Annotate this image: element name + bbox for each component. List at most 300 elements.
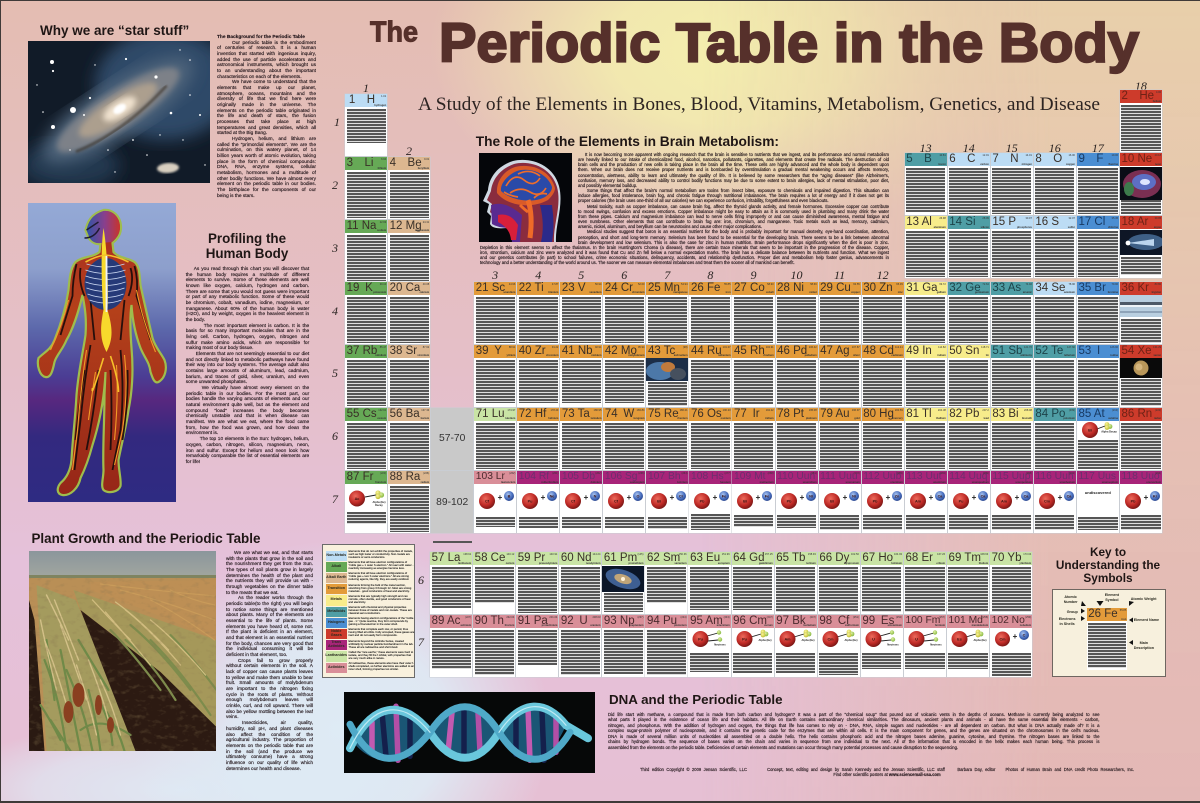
cell: 68 Er: 167.26: [937, 553, 945, 556]
cell: 81 Tl: 204.38: [938, 408, 946, 412]
cell: 26 Fe: iron: [726, 291, 731, 294]
title: The Periodic Table in the Body: The: [370, 16, 418, 48]
text: brain metabolism upper lines: brain development and low selenium. This is also the case for zinc in human nutrition. Brain performance drops significantly when the diet is poor in zinc.: [578, 240, 889, 245]
cell: 16 S: 16 S: [1035, 216, 1059, 228]
cell: 5 B: boron: [938, 163, 946, 166]
cell: 33 As: [991, 282, 1033, 344]
text: plant growth: through vegetables on the dinner table: [226, 585, 313, 590]
text: plant growth: determines our health and disease.: [226, 767, 301, 772]
cell: 91 Pa: protactinium: [542, 624, 557, 627]
key labels and arrows: Element Name: [1134, 618, 1159, 622]
cell: 99 Es: Neutrons: [887, 643, 899, 647]
cell: 96 Cm: [732, 615, 774, 677]
cell: 25 Mn: [646, 282, 689, 344]
cell: 112 Uub: Zn: [894, 494, 900, 498]
periodic table main grid: 9: [750, 268, 756, 282]
footer credits: Find other scientific posters at www.sciencemall-usa.com: [833, 772, 941, 777]
cell: 114 Uuq: ununquadium: [972, 481, 989, 484]
cell: 56 Ba: [388, 408, 430, 470]
period numbers main table: 2: [332, 178, 338, 192]
cell: 98 Cf: [818, 615, 860, 677]
cell: 112 Uub: Pb: [872, 499, 878, 503]
cell: 50 Sn: [948, 344, 990, 407]
text: plant growth: Crops fail to grow properly: [238, 659, 313, 664]
text: plant growth: periodic table(to the right) you will begin: [226, 602, 313, 607]
cell: 110 Uun: 110 Uun: [777, 471, 815, 482]
period numbers main table: 4: [332, 304, 338, 318]
cell: 58 Ce: [473, 552, 515, 614]
cell: 118 Uuo: 118 Uuo: [1121, 471, 1160, 482]
cell: 28 Ni: [776, 282, 818, 344]
cell: 12 Mg: [388, 220, 430, 282]
text: plant growth: Insecticides, air quality,: [242, 721, 313, 726]
cell: 76 Os: 190.23: [723, 408, 731, 412]
cell: 111 Uuu: Ni: [852, 494, 855, 498]
text: profiling the human body: chemically unstable and that is when disease can: [186, 414, 309, 419]
cell: 80 Hg: mercury: [893, 417, 903, 420]
cell: 78 Pt: 78 Pt: [777, 408, 804, 420]
cell: 117 Uus undiscovered: undiscovered: [1085, 490, 1111, 495]
cell: 107 Bh: +: [670, 493, 675, 502]
text: The Background for the Periodic Table: atmosphere, oceans, mountains and the: [217, 92, 316, 97]
cell: 72 Hf: [517, 408, 559, 470]
cell: 69 Tm: 168.93: [980, 553, 988, 556]
cell: 50 Sn: 118.71: [981, 346, 989, 348]
cell: 109 Mt: Fe: [765, 494, 770, 498]
text: profiling the human body: There are some that you would not guess were important: [186, 290, 309, 295]
legend: element categories: Alkali Earth: [326, 575, 346, 579]
cell: 67 Ho: 67 Ho: [862, 552, 893, 564]
cell: 52 Te: 52 Te: [1035, 344, 1063, 356]
cell: 47 Ag: 107.87: [852, 346, 860, 348]
key labels and arrows: Symbol: [1105, 598, 1119, 602]
cell: 76 Os: 76 Os: [691, 408, 722, 420]
period numbers main table: 7: [332, 492, 338, 506]
title: The Periodic Table in the Body: Periodic Table in the Body: [439, 12, 1139, 74]
cell: 56 Ba: 137.33: [421, 408, 429, 412]
cell: 110 Uun: +: [799, 493, 804, 502]
text: plant growth: are important to the nitrogen fixing: [226, 687, 313, 692]
cell: 71 Lu: 71 Lu: [476, 408, 505, 420]
cell: 17 Cl: 35.45: [1112, 217, 1118, 220]
cell: 75 Re: rhenium: [677, 417, 688, 420]
cell: 26 Fe: 26 Fe: [691, 282, 720, 294]
cell: 118 Uuo: Kr: [1153, 494, 1158, 498]
cell: 53 I: 126.90: [1110, 346, 1118, 348]
cell: 98 Cf: Alpha (He): [844, 638, 857, 642]
cell: 111 Uuu: +: [842, 493, 847, 502]
cell: 44 Ru: 44 Ru: [691, 344, 722, 356]
periodic table main grid: 13: [920, 141, 932, 155]
text: The Background for the Periodic Table: [217, 34, 316, 199]
cell: 93 Np: neptunium: [630, 624, 644, 627]
cell: 104 Rf: Pu: [528, 499, 533, 503]
cell: 80 Hg: [862, 408, 904, 470]
cell: 50 Sn: tin: [986, 354, 989, 357]
cell: 45 Rh: 45 Rh: [734, 344, 765, 356]
text: profiling the human body: iron and sulfur. Except for helium and neon look how: [186, 448, 309, 454]
legend: element categories: Elements that are typically high strength and can corrode, often ductile, and good conductors of heat and electricity.: [348, 595, 411, 604]
text: plant growth: with the plants that grow in the soil and: [226, 557, 313, 562]
text: brain metabolism upper lines: concentration, alertness, ability to learn and ultimately the quality of life. It is believed by some researchers that the "aging diseases" (like Alzheimer's,: [578, 173, 889, 178]
cell: 35 Br: [1077, 282, 1119, 344]
cell: 61 Pm: promethium: [628, 562, 644, 565]
text: brain metabolism upper lines: to mood swings, confusion and excess emotions. Copper imbalance might be easy to attain as it is commonly used in plumbing and many drink the water: [578, 209, 889, 214]
text: The Background for the Periodic Table: billion years worth of atomic evolution, taking: [217, 154, 316, 159]
cell: 99 Es: 99 Es: [862, 615, 894, 627]
cell: 87 Fr: [345, 471, 387, 533]
cell: 62 Sm: samarium: [674, 562, 687, 565]
cell: 16 S: sulfur: [1068, 226, 1075, 229]
cell: 73 Ta: 73 Ta: [562, 408, 590, 420]
text: brain metabolism upper lines: induce allergies, food intolerance, brain fog, and chronic fatigue through nutritional imbalances. The brain requires a lot of energy and if it does not get its: [578, 193, 889, 198]
key labels and arrows: Description: [1134, 646, 1154, 650]
text: plant growth: in the soil (and the produce we: [226, 750, 313, 755]
cell: 114 Uuq: [948, 471, 990, 533]
cell: 96 Cm: Alpha (He): [758, 638, 771, 642]
text: brain metabolism upper lines: arsenic, nickel, aluminum, and beryllium can be neurotoxins and cause other major complications.: [578, 224, 762, 229]
cell: 10 Ne: 10 Ne: [1121, 153, 1152, 165]
cell: 65 Tb: terbium: [806, 562, 816, 565]
cell: 94 Pu: [645, 615, 688, 677]
cell: 82 Pb: 207.2: [982, 408, 989, 412]
text: The Background for the Periodic Table: added the use of particle accelerators and: [217, 58, 316, 63]
cell: 83 Bi: [991, 408, 1033, 470]
legend: element categories: Elements that all have electron configurations of "noble gas + 1 outer S electron." All react with water - reactivity increasing as energies become less.: [348, 561, 413, 570]
cell: 109 Mt: 109 Mt: [734, 471, 766, 482]
legend: element categories: Metalloids: [327, 609, 345, 613]
period numbers main table: [332, 115, 340, 506]
cell: 5 B: [905, 153, 947, 215]
cell: 11 Na: 11 Na: [347, 220, 376, 232]
cell: 49 In: 114.82: [938, 346, 946, 348]
cell: 4 Be: 9.01: [424, 158, 429, 161]
cell: 106 Sg: [603, 471, 645, 533]
cell: 69 Tm: [947, 552, 989, 614]
text: profiling the human body: and not directly linked to metabolic pathways have found: [186, 358, 309, 363]
cell: 106 Sg: Cf: [614, 499, 619, 503]
cell: 104 Rf: Ne: [550, 494, 555, 498]
cell: 113 Uut: 113 Uut: [906, 471, 942, 482]
cell: 112 Uub: 112 Uub: [863, 471, 901, 482]
cell: 53 I: [1077, 344, 1119, 407]
cell: 103 Lr: B: [508, 494, 511, 498]
period numbers lower table: 7: [418, 635, 424, 649]
cell: 46 Pd: palladium: [805, 354, 817, 357]
cell: 9 F: fluorine: [1109, 163, 1118, 166]
cell: 28 Ni: 58.69: [810, 282, 817, 286]
period numbers lower table: [418, 573, 424, 649]
cell: 23 V: vanadium: [589, 291, 601, 294]
cell: 8 O: [1034, 153, 1076, 215]
cell: 102 No: Cm: [999, 638, 1006, 642]
cell: 115 Uup: ununpentium: [1016, 481, 1032, 484]
cell: 44 Ru: [689, 344, 732, 407]
cell: 93 Np: [602, 615, 644, 677]
cell: 99 Es: (252): [896, 616, 902, 619]
cell: 40 Zr: 91.22: [552, 346, 558, 348]
text: brain metabolism upper lines: and possibly elemental buildup.: [578, 183, 637, 188]
cell: 92 U: 92 U: [561, 615, 588, 627]
cell: 19 K: potassium: [373, 291, 386, 294]
cell: 90 Th: [473, 615, 515, 677]
text: profiling the human body: basis for so many important molecules that are in the: [186, 329, 309, 334]
cell: 112 Uub: [862, 471, 904, 533]
text: profiling the human body: making most of our body tissue.: [186, 346, 253, 351]
cell: 50 Sn: 50 Sn: [949, 344, 979, 356]
sample element cell: 26 Fe: 55.85: [1120, 609, 1126, 612]
cell: 112 Uub: (285): [897, 472, 903, 475]
periodic table main grid: 3: [492, 268, 498, 282]
cell: 101 Md: Alpha (He): [973, 638, 987, 642]
cell: 24 Cr: [603, 282, 645, 344]
text: profiling the human body: manifest. We are what we eat, where the food came: [186, 420, 309, 425]
cell: 14 Si: 28.09: [982, 217, 989, 220]
text: profiling the human body: elements to survive. Some of these elements are well: [186, 278, 309, 283]
cell: 31 Ga: gallium: [937, 291, 946, 294]
cell: 112 Uub: ununbium: [890, 481, 903, 484]
cell: 55 Cs: [345, 408, 387, 470]
text: The Background for the Periodic Table: Hydrogen, helium, and lithium are: [232, 137, 316, 142]
cell: 2 He: [1120, 90, 1162, 152]
cell: 23 V: 50.94: [595, 282, 601, 286]
image: human body nervous system: [28, 203, 176, 502]
cell: 48 Cd: [862, 344, 904, 407]
cell: 37 Rb: rubidium: [375, 354, 386, 357]
text: plant growth: veins.: [226, 715, 239, 720]
cell: 101 Md: mendelevium: [972, 624, 988, 627]
cell: 115 Uup: Ca: [1023, 494, 1029, 498]
cell: 21 Sc: 21 Sc: [476, 282, 505, 294]
cell: 118 Uuo: Pb: [1130, 499, 1136, 503]
cell: 81 Tl: [905, 408, 947, 470]
cell: 72 Hf: 178.49: [550, 408, 558, 412]
text: plant growth: without certain elements in the soil. A: [226, 664, 313, 669]
heading: Key to Understanding the Symbols: [1056, 544, 1160, 585]
cell: 35 Br: bromine: [1108, 291, 1118, 294]
lanthanides and actinides grid: [430, 552, 1032, 678]
cell: 21 Sc: 44.96: [509, 282, 515, 286]
cell: 116 Uuh: +: [1057, 493, 1062, 502]
cell: 10 Ne: 20.18: [1155, 154, 1161, 157]
cell: 102 No: +: [1013, 632, 1018, 641]
cell: 102 No: C: [1023, 634, 1026, 638]
cell: 108 Hs: 108 Hs: [691, 471, 724, 482]
cell: 46 Pd: 106.42: [809, 346, 817, 348]
text: profiling the human body: bodies handle the varying amounts of elements and our: [186, 397, 309, 402]
periodic table main grid: [344, 79, 1162, 543]
cell: 40 Zr: 40 Zr: [519, 344, 546, 356]
cell: 37 Rb: 37 Rb: [347, 344, 377, 356]
cell: 111 Uuu: unununium: [846, 481, 860, 484]
cell: 61 Pm: [602, 552, 644, 614]
text: profiling the human body: Elements that are not seemingly essential to our diet: [196, 352, 309, 357]
cell: 108 Hs: Pb: [700, 499, 705, 503]
cell: 104 Rf: (261): [552, 472, 558, 475]
image: DNA double helix: [344, 692, 595, 773]
text: The Background for the Periodic Table: diversity of life that we find here were: [217, 97, 316, 102]
cell: 112 Uub: +: [885, 493, 890, 502]
footer credits: Third edition Copyright © 2009 Jensan Scientific, LLC Concept, text, editing and design by Sarah Kennedy and the Jensan Scientific, LLC staff Barbara Day, editor Photos of Human Brain and DNA credit Photo Researchers, Inc.: [640, 766, 1134, 772]
cell: 91 Pa: [516, 615, 558, 677]
cell: 104 Rf: rutherfordium: [541, 481, 558, 484]
cell: 54 Xe: [1120, 344, 1162, 407]
text: DNA and the periodic table: assembled from the elements on the periodic table. Deficiencies of certain elements and mutations can occur through many potential processes and cause disruption to the sequencing.: [608, 745, 958, 750]
text: The Background for the Periodic Table: astronomical instruments, which brought us: [217, 63, 316, 68]
cell: 70 Yb: 70 Yb: [992, 552, 1021, 564]
cell: 75 Re: [646, 408, 689, 470]
cell: 66 Dy: [818, 552, 860, 614]
cell: 93 Np: 93 Np: [604, 615, 635, 627]
cell: 16 S: 32.07: [1068, 217, 1075, 220]
cell: 111 Uuu: (272): [854, 472, 860, 475]
cell: 10 Ne: neon: [1155, 163, 1161, 166]
cell: 63 Eu: 63 Eu: [690, 552, 720, 564]
key labels and arrows: Number: [1064, 600, 1078, 604]
cell: 13 Al: 13 Al: [906, 216, 932, 228]
cell: 108 Hs: Fe: [722, 494, 727, 498]
cell: 64 Gd: 157.25: [765, 553, 773, 556]
cell: 100 Fm: 100 Fm: [905, 615, 940, 626]
text: The Background for the Periodic Table: the life and death of stars, the fusion: [217, 114, 316, 119]
heading: Profiling the Human Body: Human Body: [206, 246, 288, 261]
cell: 91 Pa: 91 Pa: [518, 615, 548, 627]
cell: 98 Cf: Cm: [827, 638, 834, 642]
key labels and arrows: Atomic Weight: [1131, 597, 1156, 601]
text: plant growth: elements you have heard of, some not.: [226, 625, 313, 630]
cell: 104 Rf: +: [541, 493, 546, 502]
cell: 39 Y: [474, 344, 516, 407]
cell: 111 Uuu: [819, 471, 861, 533]
cell: 75 Re: 75 Re: [648, 408, 679, 420]
cell: 76 Os: [689, 408, 732, 470]
cell: 11 Na: [345, 220, 387, 282]
legend: element categories: All radioactive, these elements also have their outer f-shells completed, so further electrons are added to an inner shell, forming properties too similar.: [348, 662, 414, 671]
cell: 101 Md: [947, 615, 989, 677]
text: DNA and the periodic table: Did life start with methane, a compound that is made from both carbon and hydrogen? It was a part of the "chemical soup" that poured out of volcanic vents in the depths of oceans. Methane is currently being analyzed to see: [608, 712, 1100, 716]
cell: 15 P: 15 P: [992, 216, 1016, 228]
cell: 62 Sm: 62 Sm: [647, 552, 680, 564]
cell: 82 Pb: lead: [984, 417, 989, 420]
text: profiling the human body: contains large amounts of aluminum, lead, cadmium,: [186, 369, 309, 374]
text: The Background for the Periodic Table: originally made in the universe. The: [217, 103, 316, 108]
cell: 66 Dy: dysprosium: [844, 562, 859, 565]
cell: 115 Uup: 115 Uup: [992, 471, 1031, 482]
cell: 103 Lr: 103 Lr: [476, 471, 505, 482]
cell: 105 Db: dubnium: [590, 481, 601, 484]
text: The Background for the Periodic Table: place in the form of chemical compounds:: [217, 160, 316, 165]
cell: 82 Pb: 82 Pb: [949, 408, 979, 420]
cell: 64 Gd: gadolinium: [759, 562, 773, 565]
cell: 22 Ti: 47.87: [552, 282, 558, 286]
cell: 96 Cm: 96 Cm: [733, 615, 767, 627]
cell: 84 Po: [1034, 408, 1076, 470]
cell: 63 Eu: [688, 552, 731, 614]
group box: 57-70: [431, 408, 473, 470]
cell: 42 Mo: 42 Mo: [605, 344, 637, 356]
cell: 113 Uut: Ca: [937, 494, 943, 498]
sample element cell: 26 Fe: [1087, 608, 1127, 670]
cell: 4 Be: [388, 157, 430, 219]
cell: 104 Rf: 104 Rf: [519, 471, 549, 482]
cell: 52 Te: 127.60: [1067, 346, 1075, 348]
image: brain scan head: [479, 153, 572, 242]
cell: 41 Nb: niobium: [591, 354, 601, 357]
cell: 3 Li: 6.94: [381, 158, 386, 161]
cell: 53 I: iodine: [1110, 354, 1118, 357]
cell: 108 Hs: +: [713, 493, 718, 502]
cell: 70 Yb: ytterbium: [1019, 562, 1031, 565]
cell: 60 Nd: 144.24: [592, 553, 600, 556]
cell: 1 H: [345, 94, 387, 156]
cell: 82 Pb: [948, 408, 990, 470]
text: The Background for the Periodic Table: processes that take place at high: [217, 120, 316, 125]
text: brain metabolism lower lines: iron, strontium, calcium and zinc were analyzed and it was found that Cu and Zn fell below a normal expectation marks. The brain has a delicate balance between its nutrients and function. What we ingest: [480, 250, 889, 255]
cell: 18 Ar: argon: [1154, 226, 1161, 229]
text: DNA and the periodic table: DNA is made of several million units of nucleotides all assembled on a double helix. The helix contains phosphoric acid and the nitrogen bases adenine, guanine, cytosine, and thymine. The nitrogen bases are linked to the: [608, 734, 1100, 739]
cell: 95 Am: [688, 615, 731, 677]
cell: 31 Ga: 31 Ga: [906, 282, 938, 294]
cell: 47 Ag: [819, 344, 861, 407]
text: The Background for the Periodic Table: The Background for the Periodic Table: [217, 35, 305, 40]
cell: 1 H: 1.01: [381, 95, 386, 98]
cell: 62 Sm: [645, 552, 688, 614]
cell: 34 Se: [1034, 282, 1076, 344]
cell: 34 Se: 78.96: [1068, 282, 1075, 286]
text: profiling the human body: known like oxygen, calcium, hydrogen and carbon.: [186, 284, 309, 289]
legend: element categories: Elements that complete each row, or period, thus having filled all orbits. Fully occupied, these gases are inert and do not easily form compounds.: [348, 628, 414, 637]
text: plant growth: ultimately consume) have a strong: [226, 755, 313, 760]
cell: 84 Po: polonium: [1063, 417, 1075, 420]
legend: element categories: Non-Metals: [326, 553, 346, 557]
cell: 58 Ce: 140.12: [506, 553, 514, 556]
text: brain metabolism upper lines: proper calories (the brain uses one-third of all our calories) we can experience confusion, irritability, forgetfulness and even blackouts.: [578, 198, 829, 203]
group box: 89-102: [431, 471, 473, 533]
text: brain metabolism upper lines: brain cells and the production of new cells is taking place in the brain all the time. These cells are highly advanced and the whole body is dependent upon: [578, 162, 889, 167]
text: profiling the human body: or part of any metabolic function. Some of these would: [186, 295, 309, 300]
cell: 59 Pr: praseodymium: [539, 562, 557, 565]
cell: 97 Bk: berkelium: [804, 624, 816, 627]
cell: 40 Zr: [517, 344, 559, 407]
cell: 8 O: 8 O: [1035, 153, 1062, 165]
cell: 29 Cu: 29 Cu: [820, 282, 851, 294]
cell: 101 Md: 101 Md: [949, 615, 983, 626]
cell: 57 La: [430, 552, 472, 614]
cell: 74 W: 183.84: [637, 408, 644, 412]
cell: 83 Bi: 83 Bi: [992, 408, 1019, 420]
cell: 86 Rn: [1120, 408, 1162, 470]
cell: 106 Sg: +: [627, 493, 632, 502]
legend: element categories: Halogens: [328, 620, 345, 624]
cell: 110 Uun: ununnilium: [803, 481, 817, 484]
cell: 72 Hf: hafnium: [548, 417, 558, 420]
cell: 25 Mn: 25 Mn: [648, 282, 680, 294]
cell: 66 Dy: 66 Dy: [819, 552, 849, 564]
cell: 99 Es: U: [872, 638, 875, 642]
text: brain metabolism upper lines: Medical studies suggest that boron is an essential nutrient for the body and is probably important for manual dexterity, eye-hand coordination, attention,: [587, 229, 889, 234]
periodic table main grid: 2: [406, 144, 412, 158]
cell: 111 Uuu: 111 Uuu: [820, 471, 858, 482]
text: The Background for the Periodic Table: elements on the periodic table originated in: [217, 109, 316, 114]
legend: element categories: Actinides: [328, 665, 345, 669]
cell: 47 Ag: silver: [853, 354, 860, 357]
text: DNA and the periodic table: [608, 712, 1100, 750]
cell: 77 Ir: 192.22: [766, 408, 774, 412]
cell: 68 Er: [904, 552, 946, 614]
text: The Background for the Periodic Table: other bodily functions. We have almost every: [217, 177, 316, 182]
cell: 95 Am: Neutrons: [715, 643, 727, 647]
cell: 2 He: 2 He: [1121, 90, 1154, 102]
